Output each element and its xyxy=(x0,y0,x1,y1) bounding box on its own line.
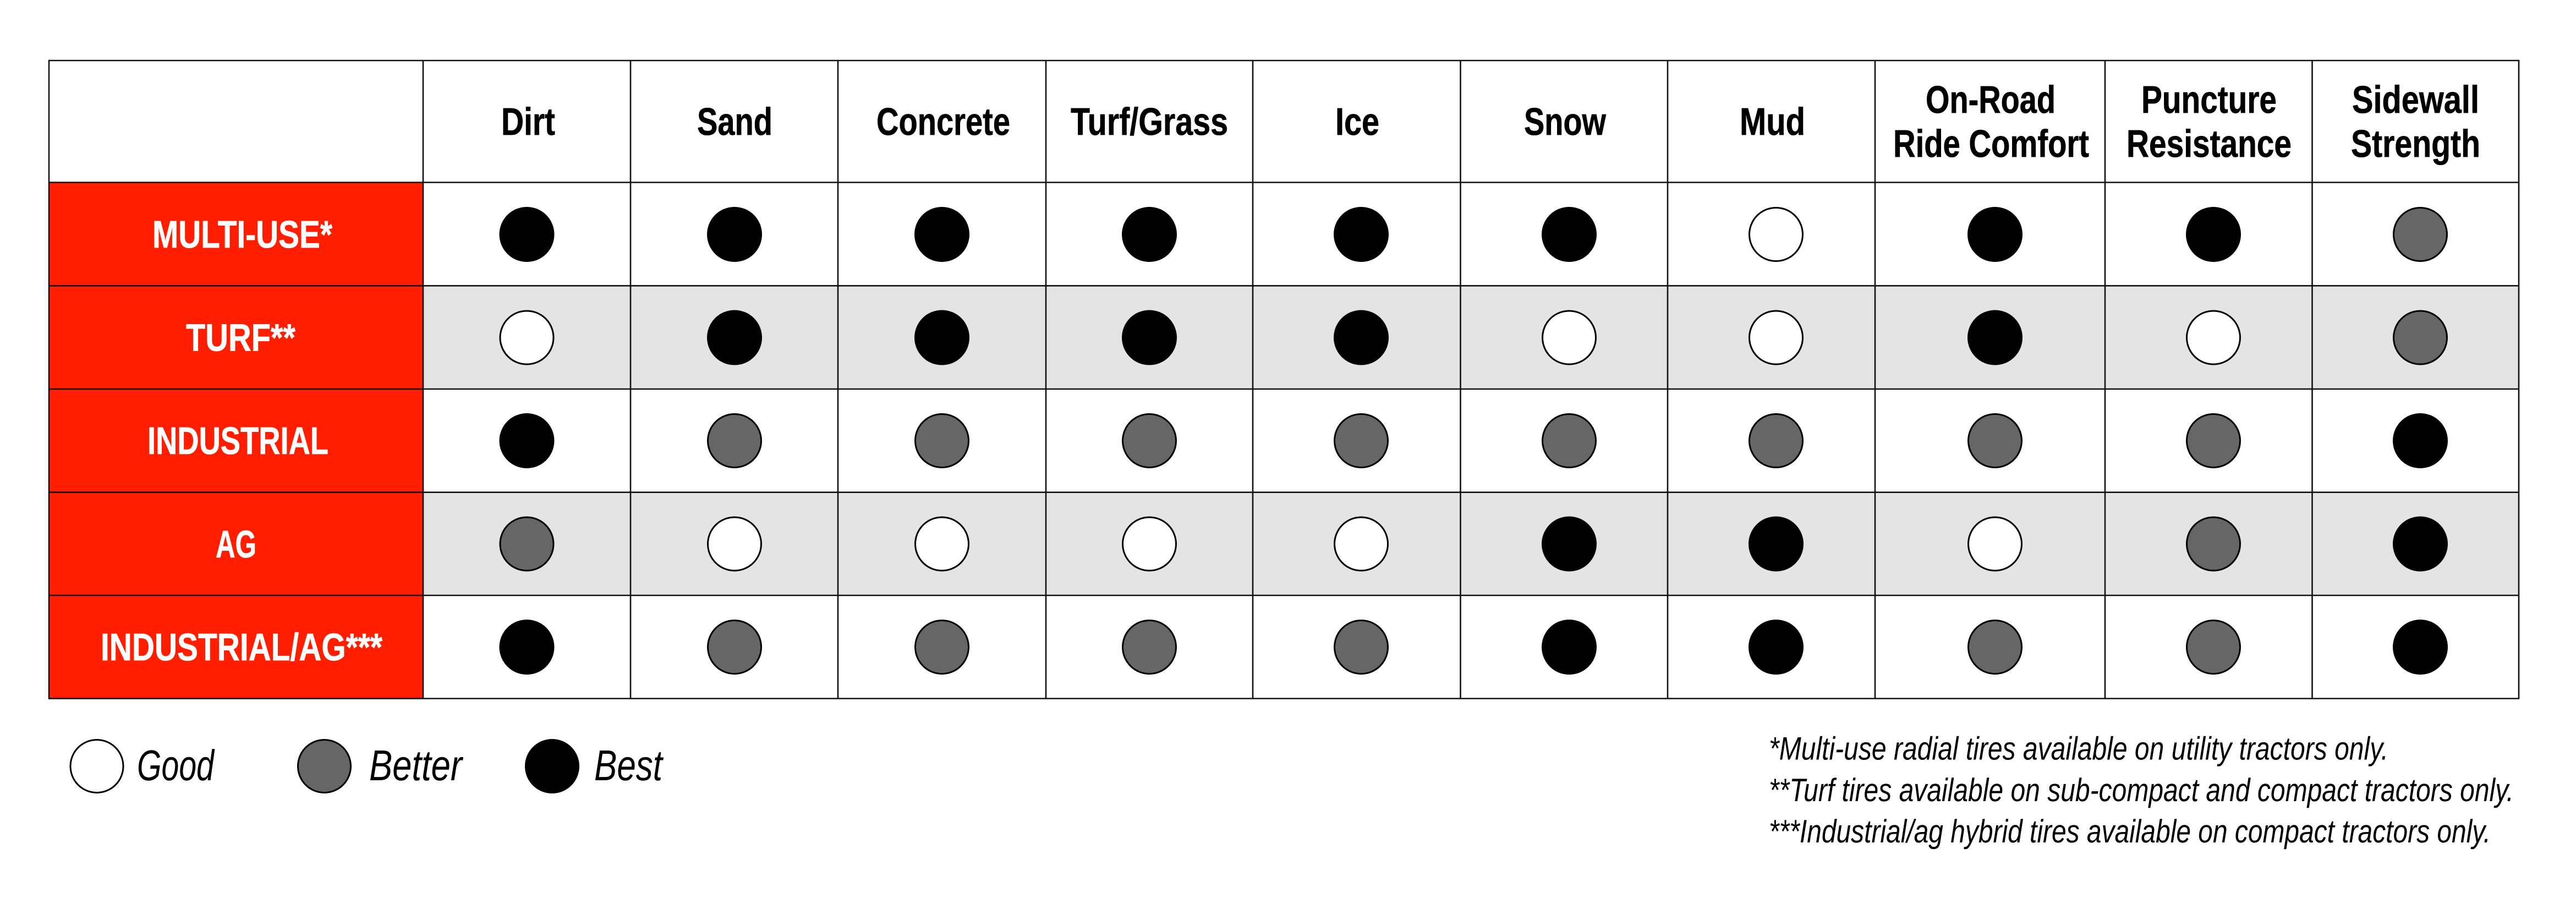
header: Turf/Grass: Turf/Grass xyxy=(1071,100,1228,143)
legend xyxy=(70,739,664,793)
rating dots: Industrial/Ag row xyxy=(500,620,2448,675)
header: On-Road Ride Comfort: Ride Comfort xyxy=(1893,122,2089,165)
header: Sand: Sand xyxy=(697,100,772,143)
header: Mud: Mud xyxy=(1740,100,1805,143)
header: On-Road Ride Comfort: On-Road xyxy=(1926,78,2056,121)
row label: Turf: TURF** xyxy=(186,316,296,359)
legend item: Best xyxy=(525,739,664,793)
rating dots: Industrial row xyxy=(500,413,2448,468)
header: Ice: Ice xyxy=(1335,100,1379,143)
header: Puncture Resistance xyxy=(2126,78,2292,165)
header: Concrete: Concrete xyxy=(876,100,1010,143)
row labels xyxy=(101,213,383,669)
legend item: Good: Good xyxy=(137,741,215,790)
legend item: Best: Best xyxy=(594,741,664,790)
footnote: Multi-use: *Multi-use radial tires available on utility tractors only. xyxy=(1769,731,2388,767)
header: Dirt: Dirt xyxy=(501,100,555,143)
footnotes xyxy=(1769,731,2514,850)
red row label column xyxy=(49,183,423,699)
header: Sidewall Strength xyxy=(2351,78,2480,165)
rating dots: Multi-use row xyxy=(500,207,2447,262)
row label: Multi-use: MULTI-USE* xyxy=(152,213,333,256)
header: On-Road Ride Comfort xyxy=(1893,78,2089,165)
rating dots: Turf row xyxy=(500,310,2447,365)
column headers xyxy=(501,78,2480,165)
row shading: Turf and Ag rows xyxy=(423,286,2519,595)
rating dots: Ag row xyxy=(500,516,2448,571)
row label: Industrial/Ag: INDUSTRIAL/AG*** xyxy=(101,626,383,669)
header: Puncture Resistance: Resistance xyxy=(2126,122,2292,165)
header: Puncture Resistance: Puncture xyxy=(2141,78,2277,121)
header: Snow: Snow xyxy=(1524,100,1606,143)
row label: Ag: AG xyxy=(216,523,256,566)
legend item: Better xyxy=(298,740,463,792)
row label: Industrial: INDUSTRIAL xyxy=(147,419,328,462)
legend item: Better: Better xyxy=(369,741,463,790)
legend item: Good xyxy=(70,740,215,792)
panel: comparison table xyxy=(49,60,2519,699)
header: Sidewall Strength: Strength xyxy=(2351,122,2480,165)
header: Sidewall Strength: Sidewall xyxy=(2352,78,2479,121)
